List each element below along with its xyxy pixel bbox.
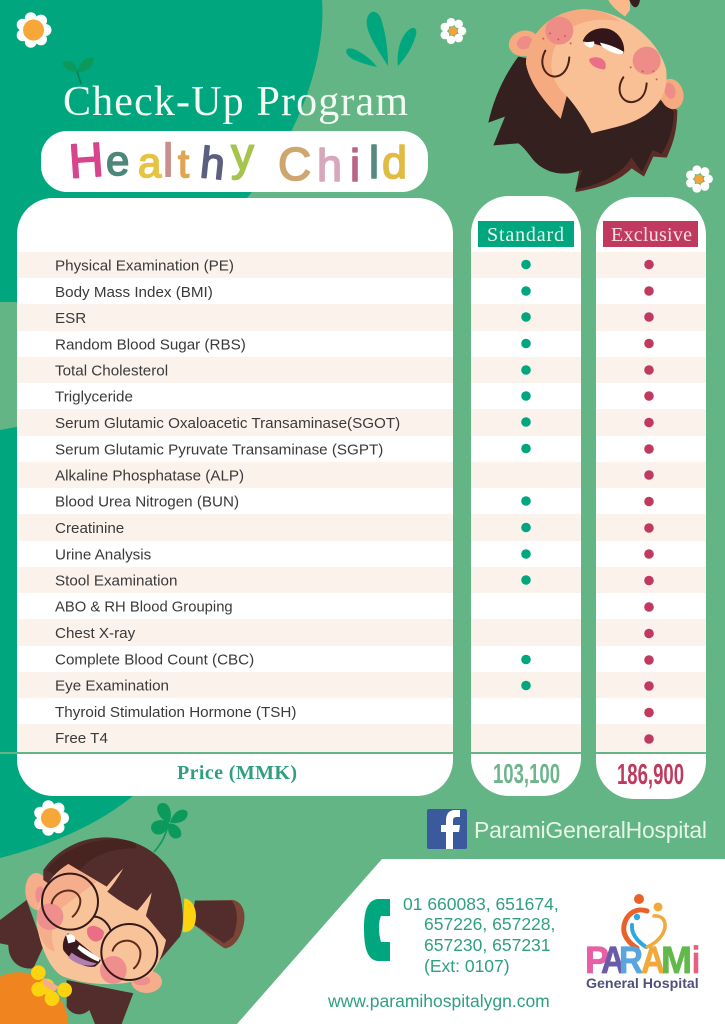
title pill: Healthy Child: d [382, 137, 407, 188]
icon: flower top left [17, 12, 52, 48]
title pill: Healthy Child [41, 128, 428, 192]
title pill: Healthy Child: a [138, 139, 162, 186]
logo emblem [624, 894, 665, 948]
illustration: upside-down child top right [488, 0, 687, 192]
title pill: Healthy Child: H [67, 134, 105, 189]
test names: Complete Blood Count (CBC) [55, 652, 254, 668]
test names: Thyroid Stimulation Hormone (TSH) [55, 704, 296, 721]
test names: Body Mass Index (BMI) [55, 284, 213, 301]
icon: sprout [63, 58, 94, 84]
test names: Alkaline Phosphatase (ALP) [55, 468, 244, 484]
test names: Creatinine [55, 520, 124, 537]
illustration: child with glasses bottom left [0, 837, 245, 1024]
test names: Serum Glutamic Oxaloacetic Transaminase(SGOT) [55, 415, 400, 432]
icon: telephone [364, 899, 390, 961]
test names: Serum Glutamic Pyruvate Transaminase (SGPT) [55, 442, 383, 458]
title pill: Healthy Child: e [106, 137, 129, 184]
standard header: Standard [487, 224, 564, 246]
test names: Free T4 [55, 730, 108, 747]
icon: flower right [686, 165, 713, 193]
logo: Parami General Hospital [585, 894, 700, 992]
panel: tests table [17, 198, 453, 796]
panel: exclusive column [596, 197, 706, 799]
background: lower-left dark green shape [0, 400, 200, 858]
logo subtitle: General Hospital [586, 976, 699, 992]
phone numbers: 657230, 657231 [424, 935, 551, 955]
title pill: Healthy Child: i [350, 140, 360, 191]
test names: Urine Analysis [55, 546, 152, 564]
test names: Total Cholesterol [55, 362, 168, 380]
icon: facebook [427, 809, 467, 849]
facebook name: ParamiGeneralHospital [474, 817, 707, 843]
title pill: Healthy Child: l [163, 134, 173, 186]
price label: Price (MMK) [177, 762, 297, 784]
logo wordmark: A [641, 940, 665, 982]
title pill: Healthy Child: h [198, 138, 227, 190]
icon: green leaves [346, 12, 416, 67]
social: Facebook [427, 809, 707, 849]
icon: clover [151, 803, 188, 852]
logo wordmark: A [601, 940, 625, 982]
logo wordmark [585, 940, 700, 982]
phone numbers: (Ext: 0107) [424, 956, 510, 976]
contact phone [364, 894, 559, 976]
test names: ESR [55, 310, 86, 327]
test names: Chest X-ray [55, 625, 136, 642]
exclusive header: Exclusive [611, 224, 692, 246]
background: white footer panel [237, 859, 725, 1024]
title pill: Healthy Child: h [317, 140, 342, 191]
test names: Blood Urea Nitrogen (BUN) [55, 494, 239, 510]
phone numbers: 657226, 657228, [424, 914, 555, 934]
test names: Physical Examination (PE) [55, 258, 234, 274]
title pill: Healthy Child: l [369, 137, 379, 188]
test names: Triglyceride [55, 388, 133, 406]
test names: Random Blood Sugar (RBS) [55, 336, 246, 354]
title pill: Healthy Child: t [178, 142, 189, 186]
test names [55, 258, 400, 747]
title pill: Healthy Child: y [231, 128, 254, 180]
title pill: Healthy Child: C [278, 138, 311, 190]
icon: flower top center [441, 18, 466, 44]
standard header [478, 221, 574, 247]
exclusive dots [644, 260, 654, 744]
exclusive price: 186,900 [617, 759, 684, 791]
test names: Eye Examination [55, 678, 169, 694]
title: Check-Up Program [63, 79, 408, 125]
test names: Stool Examination [55, 572, 177, 590]
phone numbers [403, 894, 559, 976]
row stripes [17, 252, 453, 752]
phone numbers: 01 660083, 651674, [403, 894, 559, 914]
icon: flower lower left [34, 800, 69, 836]
background: top-left dark green shape [0, 0, 322, 302]
logo wordmark: R [619, 940, 643, 982]
standard price: 103,100 [493, 758, 560, 789]
standard dots [521, 260, 531, 690]
website: www.paramihospitalygn.com [327, 991, 550, 1011]
test names: ABO & RH Blood Grouping [55, 600, 233, 616]
logo wordmark: M [661, 940, 692, 982]
logo wordmark: i [692, 940, 700, 982]
logo wordmark: P [585, 940, 609, 982]
panel: standard column [471, 196, 581, 796]
